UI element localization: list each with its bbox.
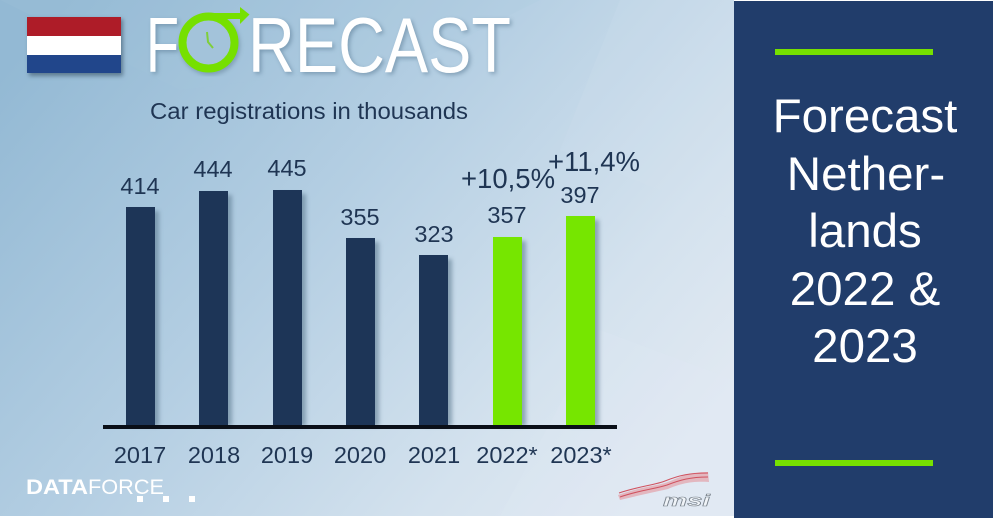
value labels: 357	[487, 202, 527, 228]
bar 2023 forecast	[566, 216, 599, 426]
panel title: 2022 &	[790, 263, 940, 316]
bar 2021	[419, 255, 452, 426]
year labels: 2017	[114, 442, 166, 468]
forecast logo: F	[148, 3, 181, 91]
forecast logo	[146, 1, 513, 91]
value labels: 355	[340, 204, 380, 230]
value labels	[120, 155, 600, 247]
top accent line	[775, 49, 933, 55]
bar 2022 forecast	[493, 237, 526, 426]
year labels: 2023*	[550, 442, 612, 468]
forecast logo: RECAST	[248, 1, 511, 89]
growth labels: +10,5%	[461, 163, 555, 194]
value labels: 397	[560, 182, 600, 208]
panel title: Nether-	[787, 148, 945, 201]
bar 2017	[126, 207, 159, 426]
msi logo: msi	[663, 491, 712, 510]
value labels: 323	[414, 221, 454, 247]
icon: green clock with arrow	[182, 7, 250, 71]
year labels	[114, 442, 612, 468]
background	[0, 0, 734, 516]
value labels: 444	[193, 156, 233, 182]
axis line	[103, 425, 617, 429]
value labels: 414	[120, 173, 160, 199]
dataforce logo: DATA	[26, 476, 88, 499]
bar 2020	[346, 238, 379, 426]
flag of the Netherlands	[27, 17, 123, 76]
dataforce logo	[26, 476, 195, 502]
forecast logo: RECAST	[250, 3, 513, 91]
year labels: 2022*	[476, 442, 538, 468]
value labels: 445	[267, 155, 307, 181]
bottom accent line	[775, 460, 933, 466]
msi logo	[618, 472, 712, 510]
year labels: 2018	[188, 442, 240, 468]
panel title: lands	[808, 205, 922, 258]
bar chart	[103, 146, 640, 468]
side panel	[734, 0, 1000, 518]
panel title	[773, 90, 957, 373]
year labels: 2019	[261, 442, 313, 468]
bar 2019	[273, 190, 306, 426]
year labels: 2021	[408, 442, 460, 468]
dataforce logo: FORCE	[88, 476, 164, 499]
year labels: 2020	[334, 442, 386, 468]
panel title: 2023	[812, 320, 918, 373]
growth labels: +11,4%	[548, 146, 640, 177]
bar 2018	[199, 191, 232, 426]
panel title: Forecast	[773, 90, 957, 143]
growth labels	[461, 146, 640, 194]
chart subtitle: Car registrations in thousands	[150, 98, 468, 124]
forecast logo: F	[146, 1, 179, 89]
